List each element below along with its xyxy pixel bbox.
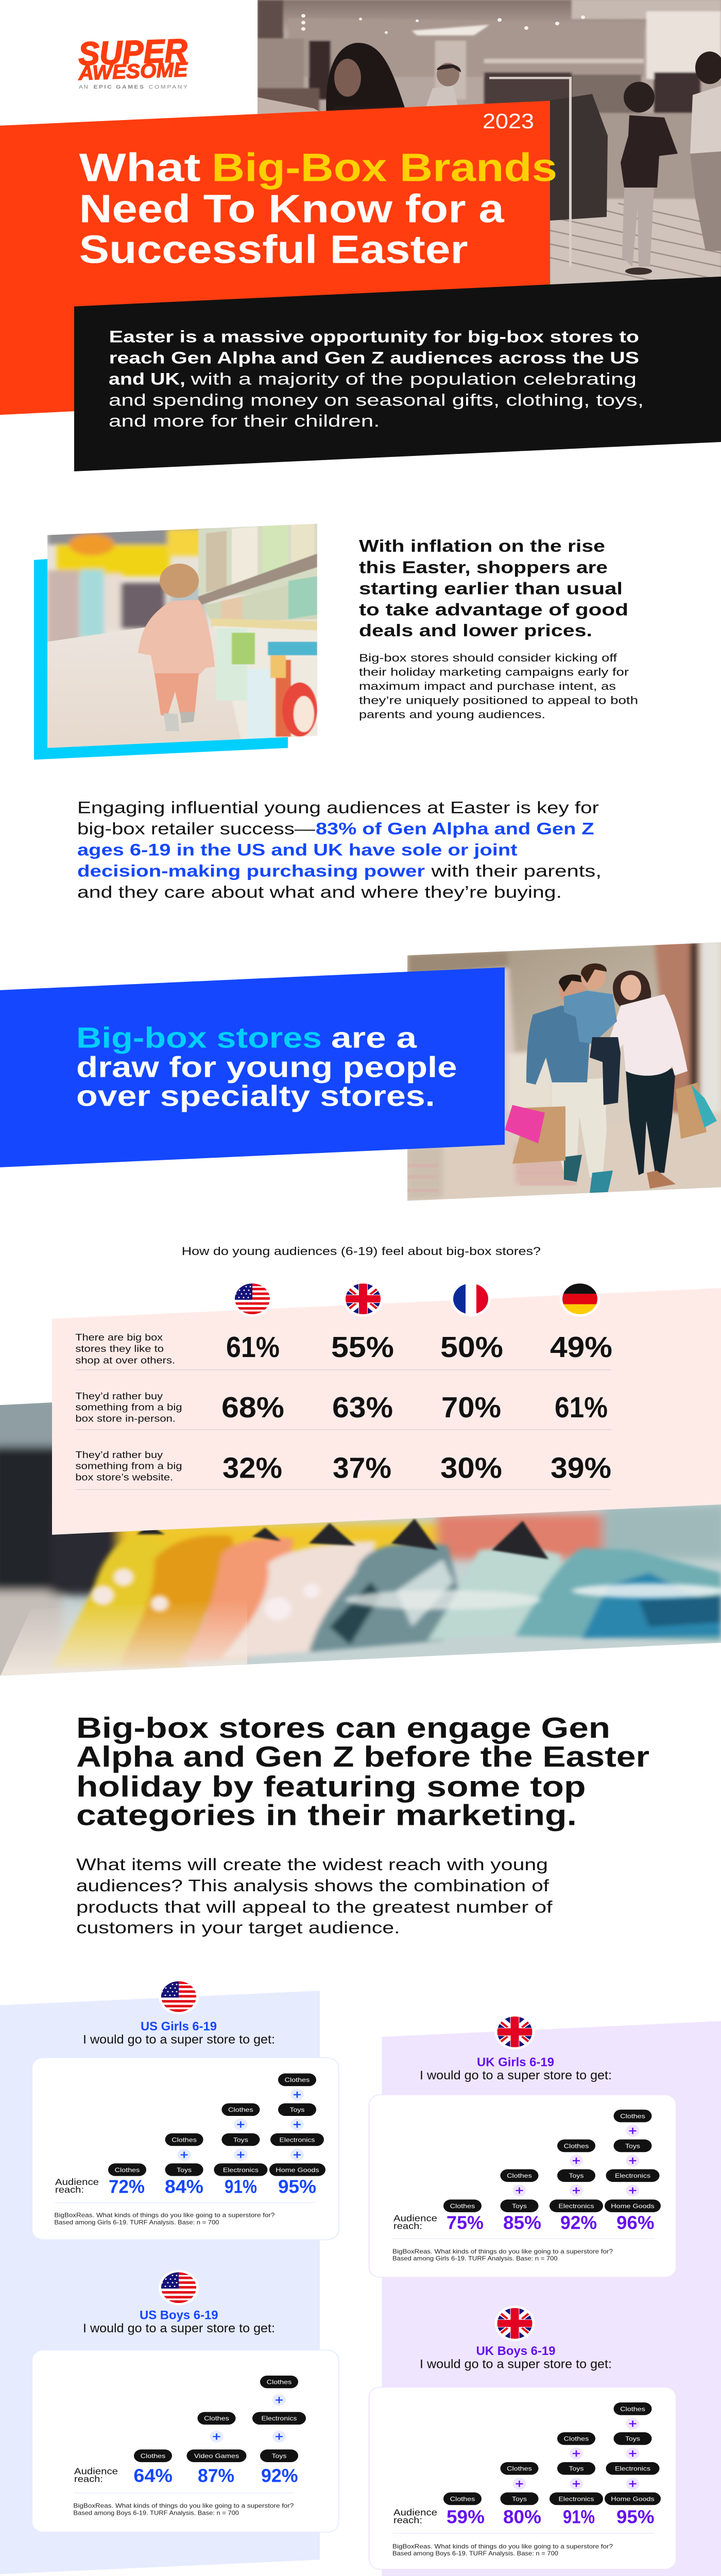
main title: Need To Know for a bbox=[79, 187, 505, 231]
man with boy on shoulders bbox=[526, 963, 621, 1193]
column 1 bbox=[108, 2163, 146, 2197]
column 2: Clothes bbox=[507, 2172, 532, 2179]
footnote bbox=[392, 2543, 613, 2557]
column 3 bbox=[252, 2376, 306, 2486]
footnote: Based among Girls 6-19. TURF Analysis. Base: n = 700 bbox=[54, 2218, 219, 2226]
orange title panel bbox=[0, 101, 550, 415]
section heading: top categories: Big-box stores can engage Gen bbox=[76, 1711, 610, 1744]
intro text: reach Gen Alpha and Gen Z audiences across the US bbox=[109, 348, 639, 367]
pink table panel bbox=[52, 1288, 721, 1535]
heading: US Boys: US Boys 6-19 bbox=[140, 2309, 218, 2322]
table row: buy on website: 32% bbox=[222, 1452, 282, 1484]
audience reach label: reach: bbox=[74, 2474, 103, 2484]
paragraph: purchasing power: decision-making purchasing power bbox=[77, 862, 425, 880]
column 4 bbox=[269, 2074, 325, 2197]
table row: like to shop at: 49% bbox=[550, 1331, 612, 1363]
carpet stripes bbox=[550, 204, 721, 289]
section heading: big-box draw: over specialty stores. bbox=[76, 1079, 435, 1112]
audience reach label: reach: bbox=[55, 2184, 84, 2195]
table row: buy on website: box store’s website. bbox=[75, 1472, 173, 1483]
section heading: top categories: Alpha and Gen Z before the Easter bbox=[76, 1740, 649, 1773]
footnote: Based among Boys 6-19. TURF Analysis. Base: n = 700 bbox=[73, 2509, 239, 2516]
column 2 bbox=[501, 2170, 541, 2233]
woman shopper bbox=[258, 43, 407, 117]
column 3: Toys bbox=[569, 2172, 584, 2179]
column 2: Clothes bbox=[171, 2136, 197, 2143]
logo: SuperAwesome: SUPER bbox=[78, 32, 188, 72]
logo: SuperAwesome: AN bbox=[79, 84, 88, 90]
flag: France bbox=[451, 1281, 491, 1316]
intro text: and more for their children. bbox=[109, 412, 380, 431]
body text: holiday marketing bbox=[359, 652, 638, 721]
intro text: with a majority of the population celebrating bbox=[190, 370, 637, 388]
column 1: Clothes bbox=[450, 2202, 475, 2210]
column 4: Toys bbox=[289, 2106, 305, 2113]
intro text: Easter is a massive opportunity for big-box stores to bbox=[109, 328, 639, 346]
shopping bags bbox=[505, 1082, 717, 1164]
column 4: Home Goods bbox=[611, 2495, 655, 2502]
year: 2023 bbox=[483, 110, 534, 133]
table row: buy in-person: box store in-person. bbox=[75, 1414, 176, 1424]
header photo: clothing store in sepia tint bbox=[258, 0, 721, 284]
hanging coat bbox=[550, 94, 608, 221]
subheading: I would go to a super store to get: bbox=[420, 2358, 612, 2371]
section heading: big-box draw bbox=[76, 1021, 457, 1112]
audience reach label bbox=[74, 2466, 118, 2484]
paragraph: purchasing power: with their parents, bbox=[431, 862, 602, 880]
column 3: Toys bbox=[569, 2465, 584, 2472]
section heading: top categories bbox=[76, 1711, 649, 1832]
footnote: Based among Girls 6-19. TURF Analysis. Base: n = 700 bbox=[392, 2255, 558, 2262]
column 3 bbox=[550, 2140, 603, 2233]
footnote bbox=[392, 2248, 613, 2262]
logo: SuperAwesome: COMPANY bbox=[149, 84, 188, 90]
column 2: Clothes bbox=[204, 2415, 229, 2422]
audience reach label: Audience bbox=[55, 2177, 99, 2187]
heading: UK Girls: UK Girls 6-19 bbox=[477, 2056, 554, 2069]
flag: Germany bbox=[560, 1281, 600, 1316]
main title: Successful Easter bbox=[79, 227, 468, 272]
body text: holiday marketing: parents and young audiences. bbox=[359, 708, 545, 721]
photo: family shopping in mall bbox=[407, 940, 721, 1202]
card bbox=[32, 2058, 339, 2240]
paragraph: purchasing power: ages 6-19 in the US and UK have sole or joint bbox=[77, 841, 518, 859]
string lights bbox=[301, 14, 585, 34]
panel: US Boys bbox=[32, 2270, 339, 2532]
audience reach label: Audience bbox=[393, 2213, 437, 2223]
paragraph: analysis intro: audiences? This analysis shows the combination of bbox=[76, 1877, 550, 1895]
column 3: Electronics bbox=[558, 2495, 594, 2502]
flag: US bbox=[159, 1979, 199, 2014]
hanger hoods bbox=[136, 1518, 548, 1559]
table row: buy in-person: 61% bbox=[555, 1392, 608, 1423]
rack pole bbox=[569, 77, 572, 267]
column 3: 92% bbox=[261, 2466, 298, 2486]
section heading: top categories: holiday by featuring some top bbox=[76, 1770, 586, 1803]
subheading: inflation bbox=[359, 536, 628, 640]
column 4: Home Goods bbox=[276, 2166, 319, 2174]
column 4: 95% bbox=[616, 2507, 654, 2528]
column 3: Electronics bbox=[558, 2202, 594, 2210]
panel: US background bbox=[0, 1991, 320, 2574]
subheading: inflation: With inflation on the rise bbox=[359, 536, 605, 556]
body text: holiday marketing: Big-box stores should consider kicking off bbox=[359, 652, 617, 664]
audience reach label: Audience bbox=[393, 2507, 437, 2517]
paragraph: analysis intro: customers in your target audience. bbox=[76, 1919, 400, 1937]
paragraph: purchasing power: and they care about what and where they’re buying. bbox=[77, 884, 562, 902]
paragraph: analysis intro: What items will create the widest reach with young bbox=[76, 1856, 548, 1874]
logo: SuperAwesome: AWESOME bbox=[77, 58, 189, 84]
column 2: Video Games bbox=[194, 2452, 239, 2460]
audience reach label: reach: bbox=[393, 2221, 422, 2231]
subheading: inflation: to take advantage of good bbox=[359, 600, 628, 619]
paragraph: purchasing power: big-box retailer success— bbox=[77, 820, 316, 838]
column 4: Clothes bbox=[285, 2076, 310, 2083]
column 4: 95% bbox=[278, 2177, 316, 2197]
section heading: big-box draw: are a bbox=[331, 1021, 417, 1054]
column 1 bbox=[443, 2493, 485, 2528]
card bbox=[369, 2387, 676, 2569]
column 1: Clothes bbox=[141, 2452, 166, 2460]
table row: like to shop at: shop at over others. bbox=[75, 1355, 175, 1366]
photo: toddler in toy aisle bbox=[47, 520, 320, 750]
intro text: and UK, bbox=[109, 370, 185, 388]
table row: buy in-person bbox=[75, 1391, 611, 1430]
body text: holiday marketing: they’re uniquely positioned to appeal to both bbox=[359, 694, 638, 706]
column 1 bbox=[443, 2199, 484, 2233]
section heading: big-box draw: Big-box stores bbox=[76, 1021, 322, 1054]
column 4: Home Goods bbox=[611, 2202, 655, 2210]
subheading: I would go to a super store to get: bbox=[83, 2033, 275, 2046]
table row: buy in-person: 68% bbox=[221, 1392, 284, 1423]
table row: like to shop at: There are big box bbox=[75, 1332, 163, 1343]
column 3: Toys bbox=[233, 2136, 248, 2143]
column 3: 91% bbox=[563, 2507, 595, 2528]
paragraph: purchasing power: 83% of Gen Alpha and Gen Z bbox=[316, 820, 594, 838]
audience reach label: reach: bbox=[393, 2515, 422, 2525]
paragraph: analysis intro bbox=[76, 1856, 553, 1937]
column 4: Electronics bbox=[279, 2136, 315, 2143]
footnote: BigBoxReas. What kinds of things do you like going to a superstore for? bbox=[392, 2543, 613, 2550]
column 2 bbox=[501, 2462, 541, 2528]
child shopper bbox=[621, 82, 678, 275]
footnote: BigBoxReas. What kinds of things do you like going to a superstore for? bbox=[392, 2248, 613, 2255]
subheading: I would go to a super store to get: bbox=[420, 2069, 612, 2082]
flag: US bbox=[159, 2270, 199, 2306]
cyan offset shape behind toddler photo bbox=[34, 543, 288, 760]
intro text: and spending money on seasonal gifts, clothing, toys, bbox=[109, 391, 644, 410]
table row: buy on website bbox=[75, 1450, 611, 1489]
body text: holiday marketing: maximum impact and purchase intent, as bbox=[359, 680, 616, 692]
survey question: How do young audiences (6-19) feel about big-box stores? bbox=[182, 1245, 541, 1258]
column 1: 59% bbox=[447, 2507, 485, 2528]
column 1: 75% bbox=[447, 2213, 484, 2233]
column 2 bbox=[165, 2133, 203, 2197]
man in background bbox=[425, 63, 461, 109]
footnote: BigBoxReas. What kinds of things do you like going to a superstore for? bbox=[54, 2211, 274, 2218]
panel: UK background bbox=[382, 2021, 721, 2576]
table row: buy in-person: They’d rather buy bbox=[75, 1391, 163, 1401]
audience reach label bbox=[55, 2177, 99, 2195]
column 2: Toys bbox=[512, 2495, 527, 2502]
flag: United Kingdom bbox=[343, 1281, 383, 1316]
column 1: 64% bbox=[133, 2466, 173, 2486]
footnote: BigBoxReas. What kinds of things do you like going to a superstore for? bbox=[73, 2502, 294, 2509]
heading: US Girls: US Girls 6-19 bbox=[141, 2020, 217, 2033]
logo: SuperAwesome bbox=[77, 32, 189, 90]
column 1 bbox=[133, 2449, 173, 2486]
column 2: 84% bbox=[165, 2177, 203, 2197]
table row: like to shop at: 55% bbox=[331, 1331, 394, 1363]
column 3: Electronics bbox=[223, 2166, 259, 2174]
subheading: inflation: deals and lower prices. bbox=[359, 621, 592, 640]
black intro panel bbox=[74, 277, 721, 471]
footnote bbox=[73, 2502, 294, 2516]
table row: buy on website: 39% bbox=[551, 1452, 611, 1484]
column 3 bbox=[214, 2103, 267, 2197]
faded lower jackets bbox=[0, 1600, 247, 1676]
table row: like to shop at: stores they like to bbox=[75, 1344, 164, 1354]
column 4 bbox=[605, 2110, 661, 2233]
column 4 bbox=[605, 2402, 661, 2528]
card bbox=[369, 2095, 676, 2277]
column 2: Toys bbox=[177, 2166, 192, 2174]
column 2: 85% bbox=[503, 2213, 541, 2233]
table row: like to shop at bbox=[75, 1331, 612, 1370]
flag: United States bbox=[232, 1281, 272, 1316]
table row: buy on website: 30% bbox=[440, 1452, 502, 1484]
section heading: big-box draw: draw for young people bbox=[76, 1050, 457, 1083]
boy bbox=[564, 991, 617, 1044]
man on right bbox=[690, 52, 721, 251]
footnote: Based among Boys 6-19. TURF Analysis. Base: n = 700 bbox=[392, 2550, 558, 2557]
audience reach label bbox=[393, 2213, 437, 2231]
column 3: Electronics bbox=[261, 2415, 297, 2422]
column 3: Clothes bbox=[564, 2142, 589, 2149]
flag: UK bbox=[494, 2014, 535, 2049]
heading: UK Boys: UK Boys 6-19 bbox=[476, 2345, 555, 2358]
column 3 bbox=[550, 2432, 603, 2528]
column 3: 92% bbox=[560, 2213, 597, 2233]
column 4: Electronics bbox=[615, 2172, 650, 2179]
table row: buy in-person: 70% bbox=[441, 1392, 501, 1423]
column 2: Clothes bbox=[507, 2465, 532, 2472]
column 3: 91% bbox=[225, 2177, 257, 2197]
paragraph: purchasing power bbox=[77, 799, 602, 902]
column 2: 87% bbox=[198, 2466, 234, 2486]
panel: US Girls bbox=[32, 1979, 339, 2240]
section heading: top categories: categories in their marketing. bbox=[76, 1799, 577, 1832]
panel: UK Boys bbox=[369, 2306, 676, 2569]
subheading: inflation: this Easter, shoppers are bbox=[359, 557, 608, 577]
paragraph: purchasing power: Engaging influential young audiences at Easter is key for bbox=[77, 799, 599, 817]
column 4: Clothes bbox=[620, 2405, 645, 2413]
column 2: Toys bbox=[512, 2202, 527, 2210]
toddler bbox=[138, 564, 215, 731]
subheading: inflation: starting earlier than usual bbox=[359, 579, 623, 598]
footnote bbox=[54, 2211, 274, 2226]
woman bbox=[609, 971, 688, 1189]
column 1: 72% bbox=[109, 2177, 145, 2197]
column 4: Electronics bbox=[615, 2465, 650, 2472]
table row: buy on website: 37% bbox=[333, 1452, 391, 1484]
card bbox=[32, 2350, 339, 2532]
main title: Big-Box Brands bbox=[212, 145, 557, 190]
subheading: I would go to a super store to get: bbox=[83, 2321, 275, 2335]
column 4: Toys bbox=[625, 2142, 640, 2149]
table row: like to shop at: 61% bbox=[226, 1331, 280, 1363]
audience reach label bbox=[393, 2507, 437, 2525]
column 3: Clothes bbox=[228, 2106, 253, 2113]
column 1: Clothes bbox=[115, 2166, 140, 2174]
column 3: Clothes bbox=[267, 2378, 292, 2385]
table row: buy in-person: 63% bbox=[332, 1392, 393, 1423]
paragraph: analysis intro: products that will appeal to the greatest number of bbox=[76, 1898, 553, 1917]
blue section panel bbox=[0, 968, 505, 1167]
column 1: Clothes bbox=[450, 2495, 475, 2502]
table row: buy in-person: something from a big bbox=[75, 1402, 182, 1413]
main title: What bbox=[79, 145, 201, 190]
table row: like to shop at: 50% bbox=[440, 1331, 503, 1363]
column 3: Clothes bbox=[564, 2435, 589, 2443]
table row: buy on website: They’d rather buy bbox=[75, 1450, 163, 1460]
logo: SuperAwesome: EPIC GAMES bbox=[94, 84, 144, 90]
column 2: 80% bbox=[503, 2507, 541, 2528]
main title bbox=[79, 145, 557, 272]
photo: colorful jackets on rack bbox=[0, 1402, 721, 1675]
column 4: 96% bbox=[616, 2213, 654, 2233]
flag: UK bbox=[494, 2306, 535, 2341]
audience reach label: Audience bbox=[74, 2466, 118, 2476]
panel: UK Girls bbox=[369, 2014, 676, 2277]
table row: buy on website: something from a big bbox=[75, 1461, 182, 1471]
column 2 bbox=[186, 2412, 246, 2486]
body text: holiday marketing: their holiday marketing campaigns early for bbox=[359, 666, 629, 678]
column 4: Clothes bbox=[620, 2112, 645, 2120]
column 3: Toys bbox=[272, 2452, 287, 2460]
intro text bbox=[109, 328, 644, 431]
column 4: Toys bbox=[625, 2435, 640, 2443]
